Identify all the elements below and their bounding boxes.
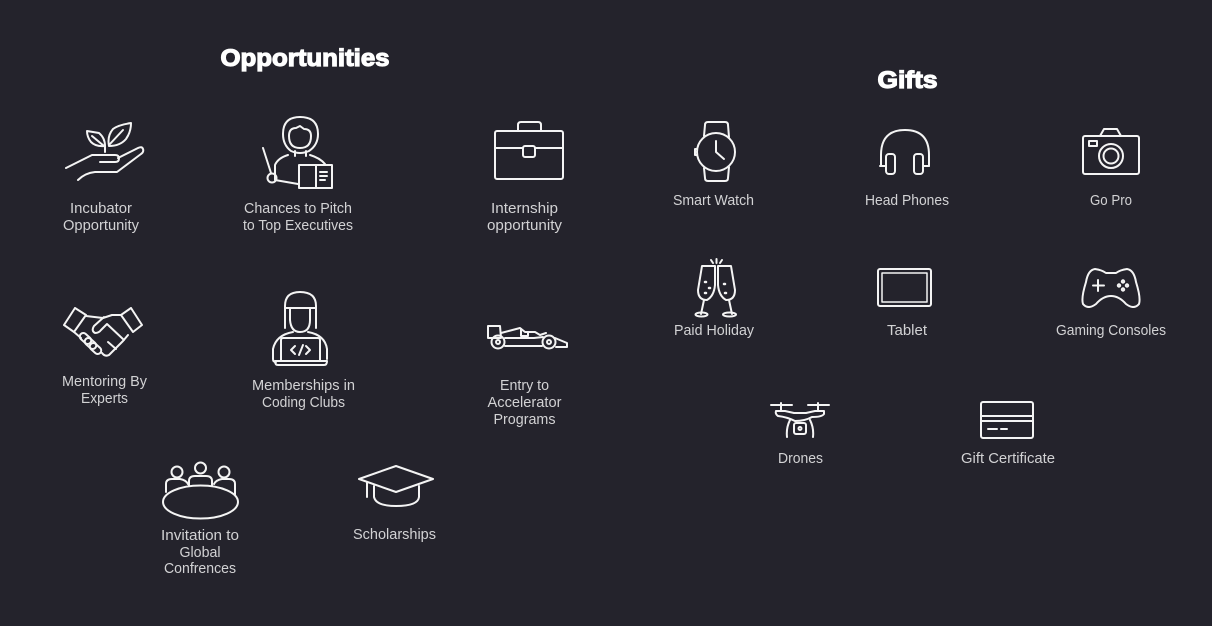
label: Smart Watch: [673, 192, 754, 209]
item: Invitation to Global Confrences: [161, 462, 239, 577]
item: Mentoring By Experts: [62, 308, 147, 407]
icon: coder with laptop: [273, 292, 327, 365]
label: [62, 373, 147, 407]
label: [488, 377, 562, 428]
icon: drone: [771, 403, 829, 437]
icon: meeting table: [163, 462, 238, 518]
label: Paid Holiday: [674, 322, 754, 339]
label: Internship: [491, 200, 558, 217]
item: Gaming Consoles: [1056, 269, 1166, 339]
label: Opportunity: [63, 217, 139, 234]
item: Drones: [771, 403, 829, 467]
label: to Top Executives: [243, 217, 353, 234]
heading: Gifts: Gifts: [878, 67, 938, 94]
icon: race car: [488, 326, 567, 348]
item: Tablet: [878, 269, 931, 339]
icon: hand holding plant: [66, 123, 143, 180]
item: Incubator Opportunity: [63, 123, 143, 234]
label: Memberships in: [252, 377, 355, 394]
item: Chances to Pitch: [243, 117, 353, 234]
item: Internship opportunity: [487, 122, 563, 234]
icon: presenter with book and pointer: [263, 117, 332, 188]
label: [161, 527, 239, 577]
label: Incubator: [70, 200, 132, 217]
item: Memberships in Coding Clubs: [252, 292, 355, 411]
icon: tablet: [878, 269, 931, 306]
label: Gaming Consoles: [1056, 322, 1166, 339]
label: Chances to Pitch: [244, 200, 352, 217]
label: Scholarships: [353, 526, 436, 543]
label: Accelerator: [488, 394, 562, 411]
label: Gift Certificate: [961, 450, 1055, 467]
label: [487, 200, 563, 234]
label: [63, 200, 139, 234]
icon: champagne glasses: [696, 259, 736, 316]
label: Head Phones: [865, 192, 949, 209]
item: Scholarships: [353, 466, 436, 543]
label: Global: [180, 544, 220, 561]
label: Tablet: [887, 322, 928, 339]
icon: graduation cap: [359, 466, 433, 506]
item: Smart Watch: [673, 122, 754, 209]
label: [243, 200, 353, 234]
label: opportunity: [487, 217, 563, 234]
icon: gift card: [981, 402, 1033, 438]
label: Experts: [81, 390, 128, 407]
item: Paid Holiday: [674, 259, 754, 339]
label: Entry to: [500, 377, 549, 394]
icon: camera: [1083, 129, 1139, 174]
item: Go Pro: [1083, 129, 1139, 209]
label: Go Pro: [1090, 192, 1132, 209]
heading: Opportunities: Opportunities: [220, 45, 390, 72]
label: Invitation to: [161, 527, 239, 544]
label: Programs: [494, 411, 556, 428]
item: Head Phones: [865, 130, 949, 209]
icon: wristwatch: [695, 122, 735, 181]
icon: handshake: [64, 308, 142, 356]
label: Confrences: [164, 560, 236, 577]
label: Coding Clubs: [262, 394, 345, 411]
item: Gift Certificate: [961, 402, 1055, 467]
item: Entry to Accelerator Programs: [488, 326, 567, 428]
icon: headphones: [880, 130, 929, 174]
label: Mentoring By: [62, 373, 147, 390]
label: Drones: [778, 450, 823, 467]
icon: game controller: [1082, 269, 1140, 307]
icon: briefcase: [495, 122, 563, 179]
label: [252, 377, 355, 411]
